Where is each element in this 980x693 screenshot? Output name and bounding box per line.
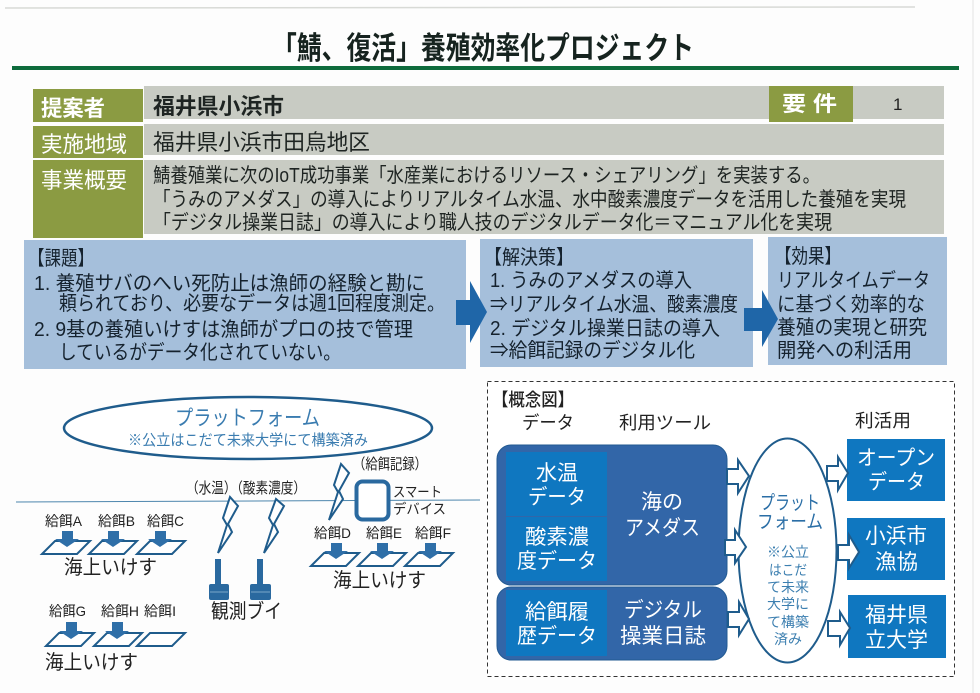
panel: digital log group: デジタル — [624, 599, 702, 622]
platform ellipse: 大学に — [767, 596, 809, 612]
diagram: raft group D-F: 海上いけす — [333, 569, 426, 592]
panel: concept diagram — [488, 382, 954, 676]
panel: sea AMeDAS group: 酸素濃 — [525, 526, 589, 549]
column headings — [522, 411, 911, 433]
output box: Obama fishery cooperative — [847, 518, 945, 580]
diagram: raft group D-F: 給餌F — [415, 525, 451, 541]
diagram: raft group G-I: 海上いけす — [45, 651, 138, 674]
diagram: raft group D-F: 給餌E — [366, 525, 402, 541]
summary text: 「デジタル操業日誌」の導入により職人技のデジタルデータ化＝マニュアル化を実現 — [153, 211, 832, 234]
area value: 福井県小浜市田烏地区 — [153, 130, 370, 155]
diagram: observation buoys: 観測ブイ — [211, 599, 282, 623]
platform ellipse: プラット — [760, 492, 820, 514]
arrow: issues to solutions — [456, 281, 487, 343]
diagram: raft group G-I: 給餌I — [144, 603, 176, 619]
output box: open data: データ — [868, 471, 925, 494]
diagram: raft group A-C: 海上いけす — [64, 556, 157, 579]
panel: digital log group: 給餌履 — [525, 601, 589, 624]
diagram: smart device: （給餌記録） — [353, 456, 427, 473]
output box: Fukui Prefectural University — [848, 595, 946, 658]
title: 「鯖、復活」養殖効率化プロジェクト — [272, 31, 694, 66]
platform ellipse: ※公立 — [767, 544, 809, 560]
output box: Fukui Prefectural University: 福井県 — [865, 604, 928, 627]
panel: solutions: 【解決策】 — [484, 246, 574, 269]
panel: issues: 頼られており、必要なデータは週1回程度測定。 — [59, 292, 445, 315]
diagram: raft group A-C: 給餌C — [147, 513, 184, 529]
diagram: raft group A-C — [42, 513, 185, 579]
platform ellipse: て構築 — [767, 614, 809, 630]
output box: Obama fishery cooperative: 小浜市 — [865, 525, 927, 548]
output box: open data: オープン — [857, 447, 935, 470]
diagram: observation buoys — [186, 480, 306, 623]
panel: sea AMeDAS group: データ — [528, 486, 586, 509]
panel: issues: 1. 養殖サバのへい死防止は漁師の経験と勘に — [34, 272, 425, 295]
panel: effects: 【効果】 — [775, 245, 841, 268]
panel: effects: リアルタイムデータ — [777, 269, 930, 292]
column headings: 利用ツール — [619, 413, 711, 433]
diagram: raft group G-I: 給餌H — [101, 603, 139, 619]
panel: sea AMeDAS group — [497, 445, 727, 585]
output box: open data — [847, 439, 945, 501]
diagram: platform ellipse — [64, 397, 432, 459]
diagram: platform ellipse: ※公立はこだて未来大学にて構築済み — [128, 431, 368, 449]
proposer value: 福井県小浜市 — [153, 94, 284, 119]
panel: sea AMeDAS group: 度データ — [517, 550, 597, 573]
platform ellipse — [738, 438, 836, 662]
output box: Obama fishery cooperative: 漁協 — [875, 551, 918, 574]
requirement value: 1 — [893, 95, 902, 114]
diagram: observation buoys: （水温）（酸素濃度） — [186, 480, 306, 497]
panel: solutions: ⇒リアルタイム水温、酸素濃度 — [490, 293, 738, 316]
diagram: smart device — [329, 456, 446, 520]
panel: issues: 【課題】 — [28, 248, 94, 270]
summary text — [153, 164, 906, 234]
panel: issues: しているがデータ化されていない。 — [59, 341, 341, 364]
panel: project info table — [33, 86, 944, 238]
platform ellipse: て未来 — [767, 579, 809, 595]
panel: issues — [24, 240, 466, 369]
panel: issues: 2. 9基の養殖いけすは漁師がプロの技で管理 — [34, 318, 413, 341]
label: proposer: 提案者 — [41, 96, 105, 121]
panel: digital log group: 歴データ — [517, 625, 597, 648]
output box: Fukui Prefectural University: 立大学 — [865, 629, 928, 652]
panel: sea AMeDAS group: 水温 — [536, 462, 578, 485]
diagram: raft group G-I: 給餌G — [49, 603, 86, 619]
panel: digital log group: 操業日誌 — [620, 625, 706, 648]
arrows: into and out of platform — [725, 457, 859, 645]
diagram: smart device: デバイス — [393, 501, 446, 517]
panel: effects — [768, 237, 947, 365]
platform ellipse: はこだ — [769, 562, 807, 578]
platform ellipse: フォーム — [757, 512, 823, 533]
panel: digital log group — [497, 587, 727, 660]
column headings: データ — [522, 413, 574, 433]
diagram: raft group D-F — [311, 525, 453, 592]
panel: sea AMeDAS group: アメダス — [625, 517, 700, 540]
arrow: solutions to effects — [744, 290, 778, 347]
panel: effects: に基づく効率的な — [777, 293, 925, 316]
diagram: platform ellipse: プラットフォーム — [175, 407, 320, 430]
diagram: raft group A-C: 給餌A — [45, 513, 83, 529]
panel: solutions: ⇒給餌記録のデジタル化 — [490, 339, 695, 362]
summary text: 鯖養殖業に次のIoT成功事業「水産業におけるリソース・シェアリング」を実装する。 — [153, 164, 820, 187]
column headings: 利活用 — [855, 411, 911, 431]
panel: effects: 養殖の実現と研究 — [777, 316, 927, 339]
concept heading: 【概念図】 — [492, 390, 574, 410]
platform ellipse: 済み — [774, 631, 802, 647]
diagram: raft group A-C: 給餌B — [98, 513, 135, 529]
label: summary: 事業概要 — [41, 168, 127, 193]
diagram: raft group D-F: 給餌D — [314, 525, 351, 541]
panel: solutions: 1. うみのアメダスの導入 — [490, 269, 692, 292]
panel: solutions — [480, 239, 753, 367]
diagram: smart device: スマート — [393, 484, 442, 500]
label: area: 実施地域 — [41, 132, 127, 157]
label: requirement: 要 件 — [782, 93, 837, 116]
panel: effects: 開発への利活用 — [777, 339, 912, 362]
panel: sea AMeDAS group: 海の — [641, 491, 683, 514]
diagram: raft group G-I — [45, 603, 185, 674]
title — [12, 31, 959, 70]
panel: solutions: 2. デジタル操業日誌の導入 — [490, 317, 720, 340]
